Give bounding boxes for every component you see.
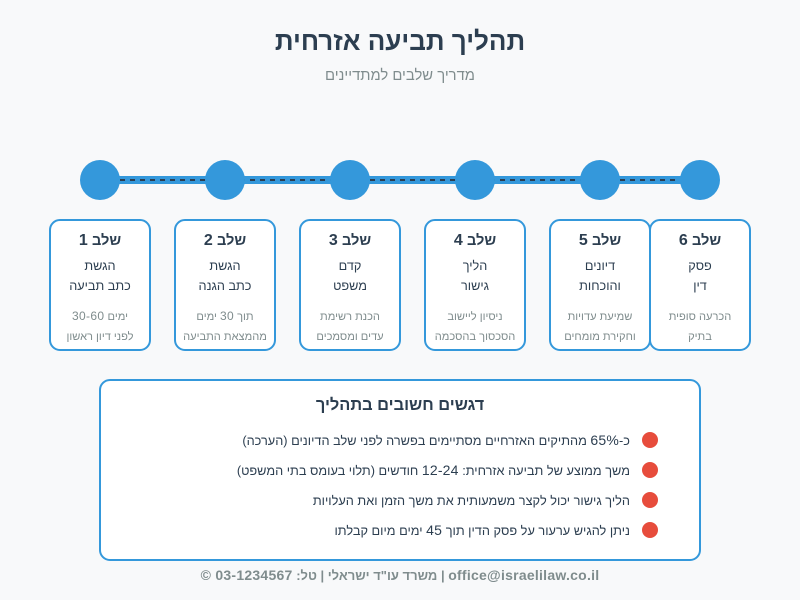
card: step 1: לפני דיון ראשון [66, 330, 134, 343]
card: step 4: גישור [461, 279, 490, 293]
card: step 6: פסק [688, 259, 712, 273]
card: step 5: והוכחות [579, 279, 621, 293]
timeline [80, 160, 720, 200]
card: step 4 [425, 220, 525, 350]
card: step 2: מהמצאת התביעה [183, 331, 267, 343]
card: step 3 [300, 220, 400, 350]
subtitle: מדריך שלבים למתדיינים [325, 67, 475, 84]
card: step 1: כתב תביעה [69, 279, 131, 293]
card: step 6 [650, 220, 750, 350]
panel: key points [100, 380, 700, 560]
bullet 3: הליך גישור יכול לקצר משמעותית את משך הזמן ואת העלויות [313, 493, 630, 508]
card: step 6: שלב 6 [679, 232, 721, 249]
card: step 5 [550, 220, 650, 350]
panel heading: דגשים חשובים בתהליך [316, 396, 485, 414]
card: step 3: קדם [339, 259, 361, 273]
card: step 2: הגשת [209, 259, 241, 273]
card: step 4: שלב 4 [454, 232, 496, 249]
card: step 3: שלב 3 [329, 232, 371, 249]
title: תהליך תביעה אזרחית [275, 26, 525, 56]
bullet 1: כ-65% מהתיקים האזרחיים מסתיימים בפשרה לפני שלב הדיונים (הערכה) [242, 432, 630, 448]
card: step 1 [50, 220, 150, 350]
card: step 4: הליך [463, 259, 487, 273]
card: step 2: תוך 30 ימים [196, 309, 254, 323]
card: step 2: שלב 2 [204, 232, 246, 249]
card: step 6: הכרעה סופית [669, 311, 731, 323]
card: step 3: עדים ומסמכים [316, 331, 384, 343]
card: step 6: דין [693, 279, 707, 293]
card: step 1: ימים 30-60 [72, 309, 128, 323]
footer: office@israelilaw.co.il | משרד עו"ד ישראלי | טל: 03-1234567 © [201, 567, 599, 583]
card: step 5: וחקירת מומחים [564, 331, 636, 343]
card: step 2: כתב הגנה [199, 279, 251, 293]
card: step 3: הכנת רשימת [320, 311, 380, 323]
card: step 1: הגשת [84, 259, 116, 273]
bullet 2: משך ממוצע של תביעה אזרחית: 12-24 חודשים (תלוי בעומס בתי המשפט) [237, 462, 630, 478]
card: step 4: הסכסוך בהסכמה [435, 331, 515, 343]
card: step 5: שמיעת עדויות [568, 311, 632, 323]
card: step 4: ניסיון ליישוב [447, 310, 503, 323]
bullet 4: ניתן להגיש ערעור על פסק הדין תוך 45 ימים מיום קבלתו [334, 522, 630, 538]
card: step 2 [175, 220, 275, 350]
card: step 5: דיונים [585, 259, 615, 273]
card: step 5: שלב 5 [579, 232, 621, 249]
card: step 3: משפט [333, 279, 367, 293]
card: step 6: בתיק [688, 331, 712, 343]
card: step 1: שלב 1 [79, 232, 121, 249]
